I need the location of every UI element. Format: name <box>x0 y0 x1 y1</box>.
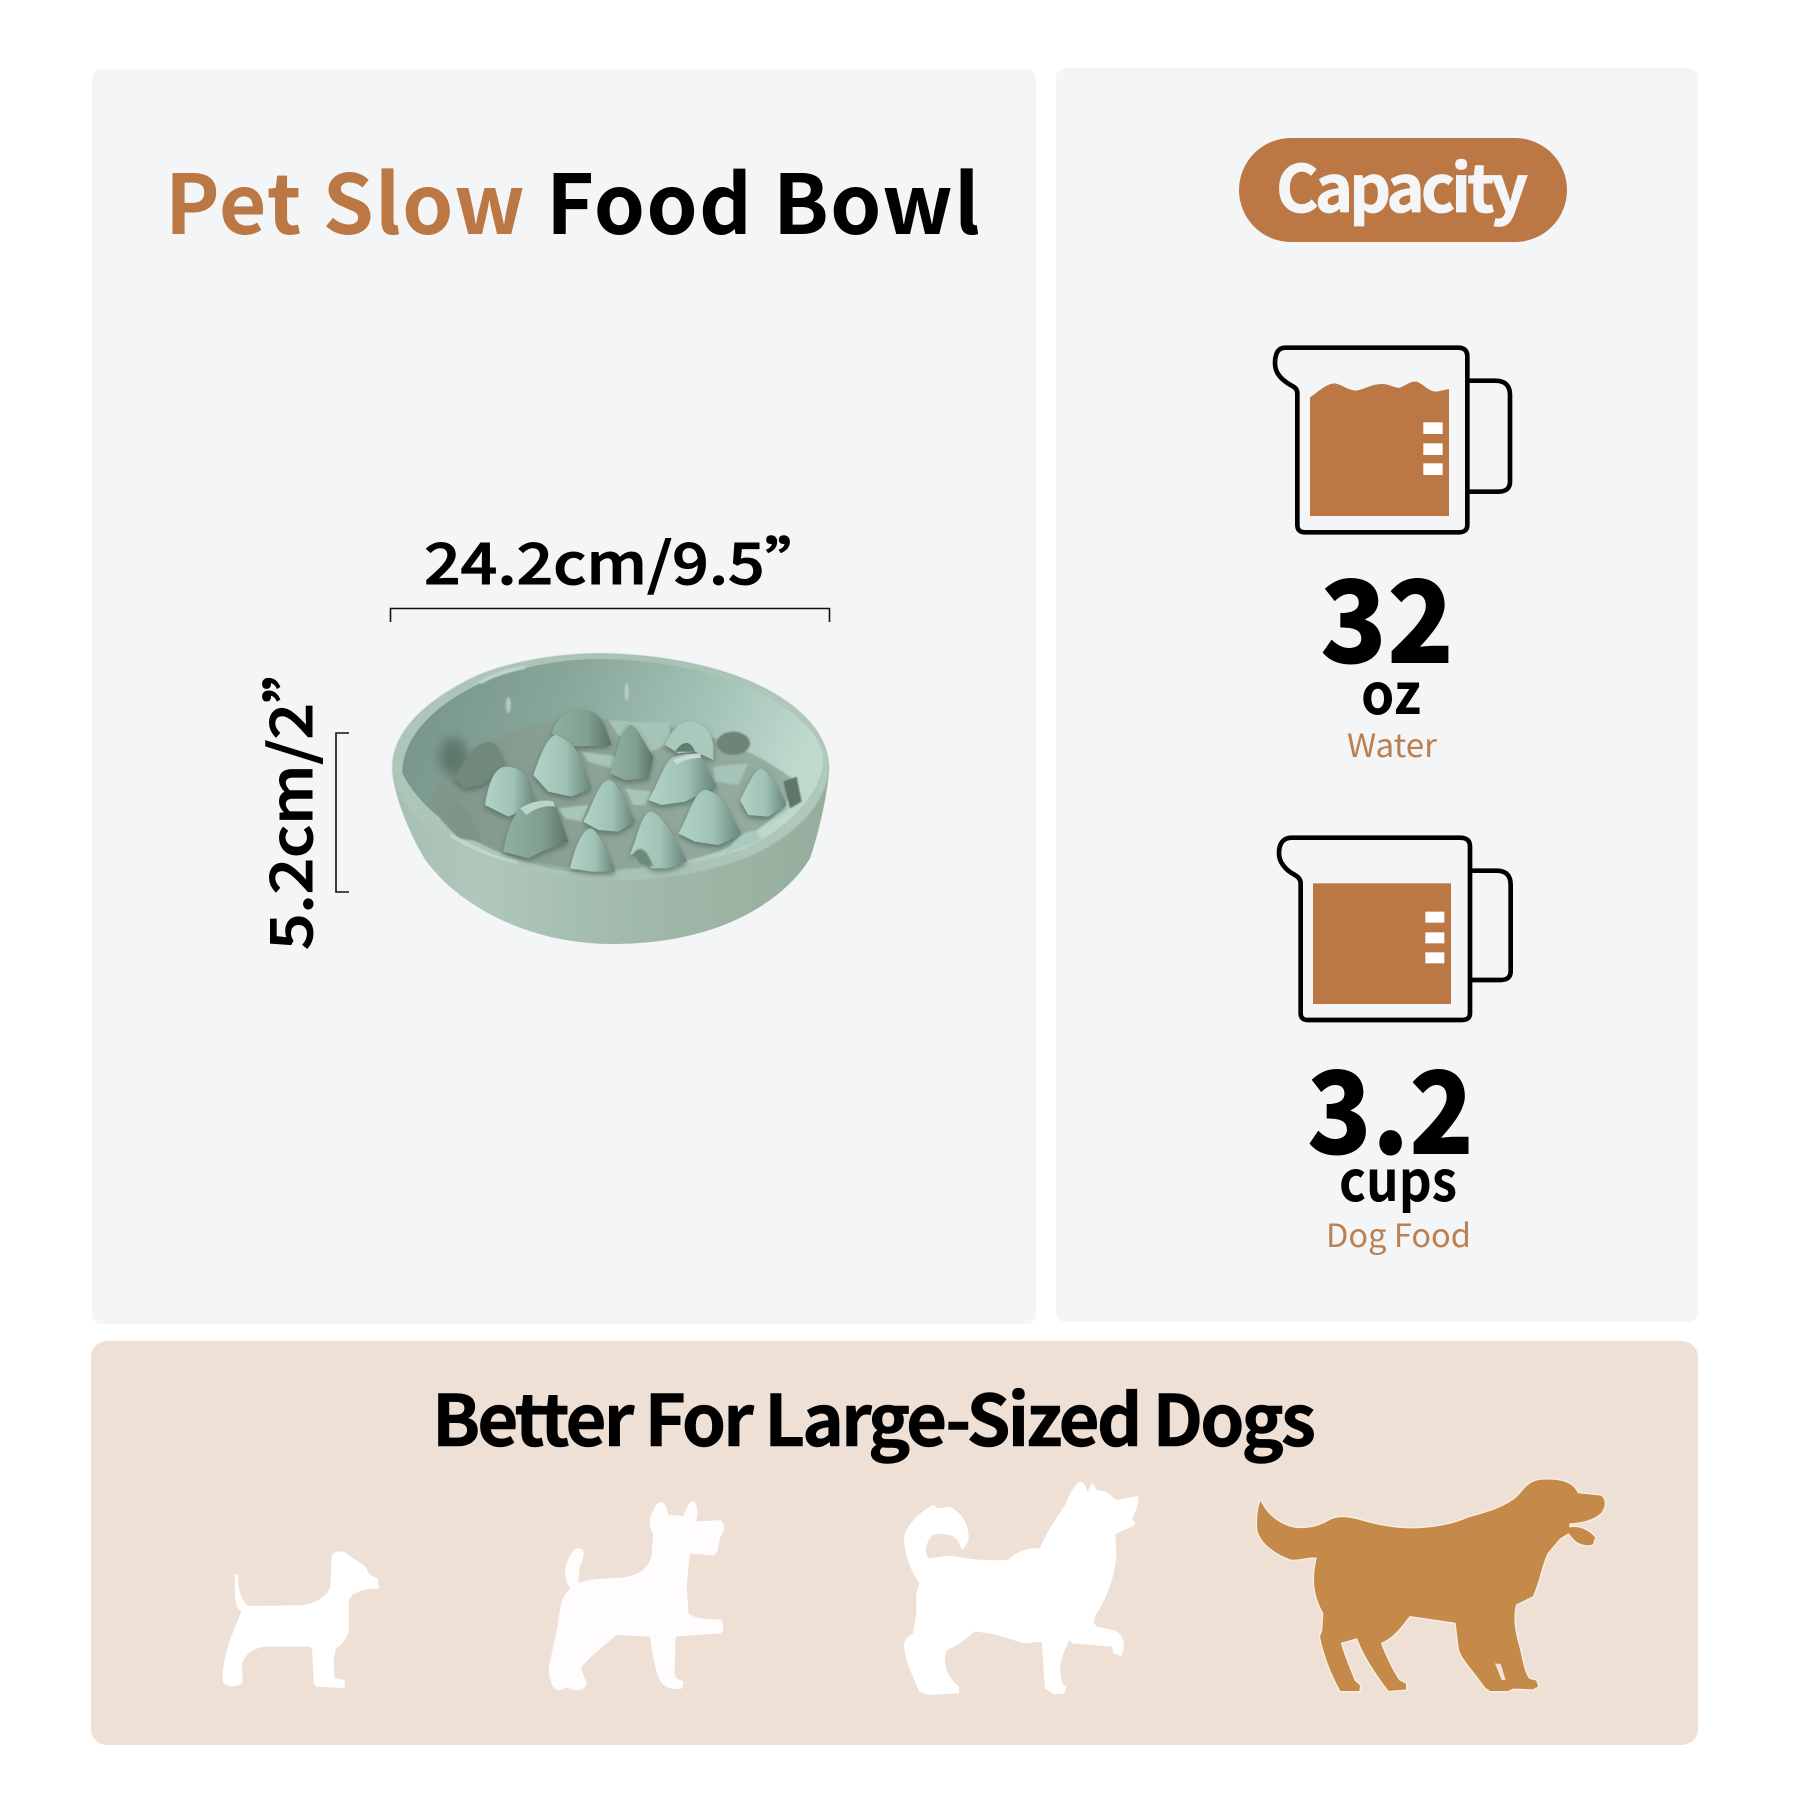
icon: measuring jug with water <box>1275 348 1510 532</box>
glaze highlights <box>450 666 629 864</box>
panel: capacity <box>1056 68 1698 1322</box>
dog food capacity value <box>1307 1022 1474 1257</box>
width bracket <box>390 608 830 622</box>
icon: fluffy dog silhouette <box>904 1482 1139 1695</box>
icon: small dog silhouette <box>223 1551 379 1688</box>
capacity badge: Capacity <box>1276 137 1528 231</box>
icon: measuring jug with dog food <box>1279 838 1511 1020</box>
panel: product <box>92 69 1036 1324</box>
icon: medium dog silhouette <box>549 1501 724 1691</box>
floor <box>428 719 793 869</box>
width dimension <box>390 519 830 622</box>
width label: 24.2cm/9.5” <box>424 519 829 601</box>
water capacity value: 32 <box>1320 531 1454 697</box>
bowl outer wall <box>392 653 829 944</box>
panel: dog sizes <box>91 1341 1698 1745</box>
product photo: ceramic slow feeder bowl <box>392 653 829 944</box>
height dimension <box>245 639 349 950</box>
height label: 5.2cm/2” <box>245 639 329 950</box>
dog food capacity value: cups <box>1339 1137 1457 1218</box>
title: Pet Slow Food Bowl <box>165 139 980 258</box>
water capacity value: Water <box>1347 721 1438 767</box>
water capacity value <box>1320 531 1454 767</box>
dog food capacity value: Dog Food <box>1326 1211 1471 1257</box>
dog food capacity value: 3.2 <box>1307 1022 1474 1188</box>
icon: large dog silhouette, highlighted <box>1256 1479 1605 1692</box>
bowl interior <box>402 659 823 872</box>
interior floor and ridges <box>428 710 802 872</box>
bowl rim <box>392 653 829 880</box>
heading: dog size: Better For Large-Sized Dogs <box>432 1365 1316 1467</box>
height bracket <box>336 733 349 892</box>
capacity badge <box>1239 137 1567 242</box>
water capacity value: oz <box>1361 650 1421 731</box>
